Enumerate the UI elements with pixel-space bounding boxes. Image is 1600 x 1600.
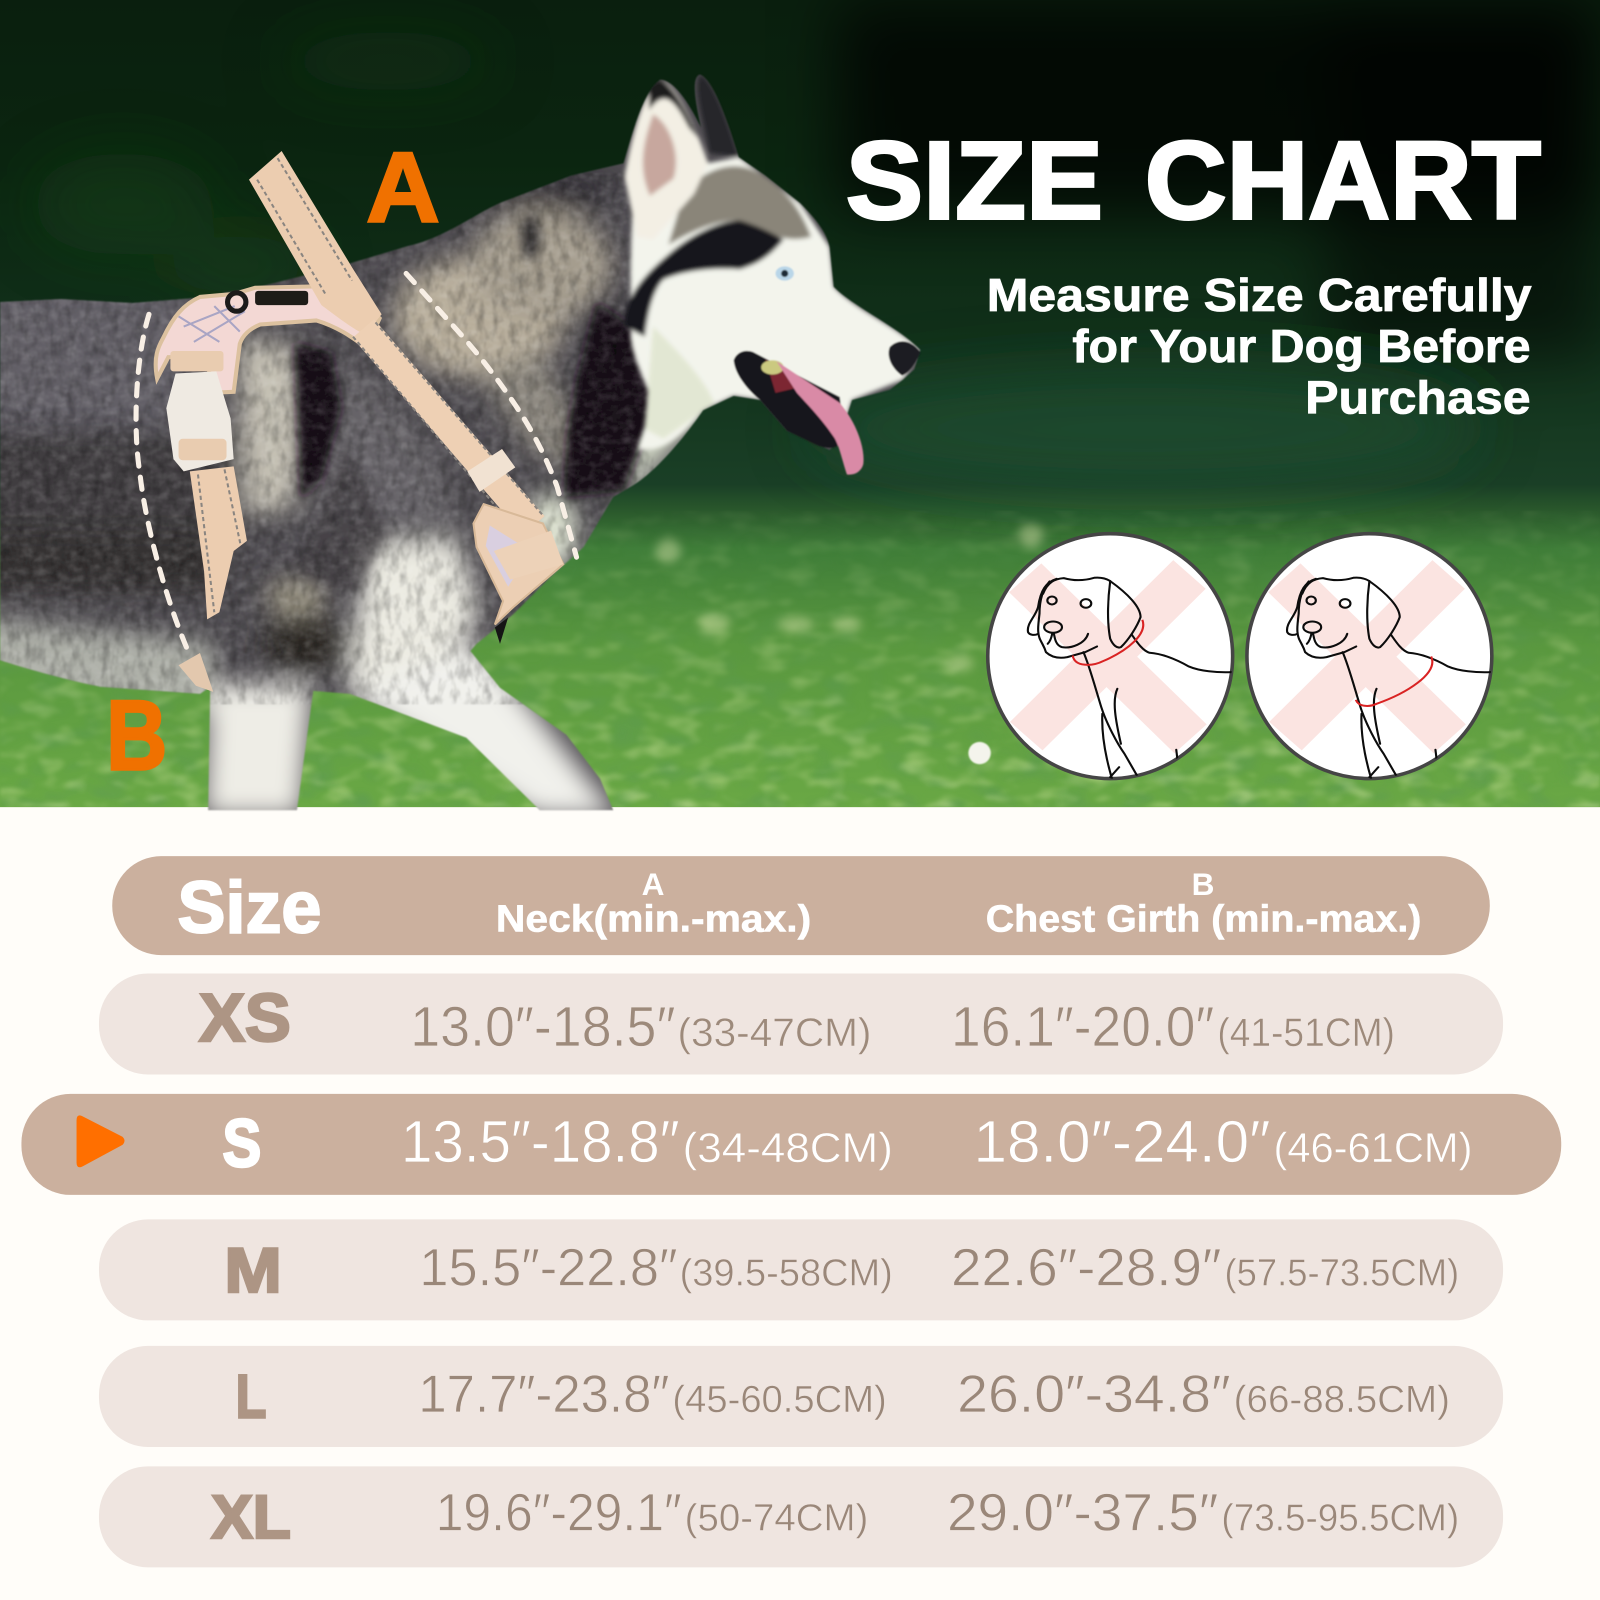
table header row: Chest Girth (min.-max.) bbox=[986, 898, 1421, 940]
row L bbox=[99, 1346, 1503, 1447]
row XS bbox=[99, 973, 1503, 1074]
chest strap bbox=[363, 329, 534, 526]
table header row: Size bbox=[178, 866, 321, 949]
icon: neck measurement circle bbox=[988, 534, 1233, 779]
row XL bbox=[99, 1466, 1503, 1567]
row L: 17.7″-23.8″ bbox=[418, 1365, 669, 1424]
hero photo: dog in a park bbox=[0, 0, 1600, 816]
left strap bbox=[190, 466, 247, 619]
grass with texture bbox=[0, 510, 1600, 807]
table header row: Neck(min.-max.) bbox=[496, 898, 811, 940]
title: SIZE bbox=[846, 119, 1103, 242]
husky dog bbox=[0, 74, 921, 812]
label B: B bbox=[106, 679, 167, 790]
row L: (66-88.5CM) bbox=[1234, 1378, 1450, 1420]
table header row: B bbox=[1192, 866, 1214, 902]
label A: A bbox=[366, 131, 440, 242]
dark fur patches bbox=[294, 214, 655, 592]
subtitle: Measure Size Carefully bbox=[987, 269, 1532, 321]
mouth, tongue, eye and nose bbox=[734, 266, 920, 475]
dashed measure line A bbox=[406, 273, 577, 557]
table header row bbox=[112, 856, 1490, 955]
row S highlighted: 13.5″-18.8″ bbox=[401, 1108, 680, 1175]
blurred foliage background bbox=[31, 0, 1600, 490]
row M: (57.5-73.5CM) bbox=[1224, 1252, 1459, 1294]
row M: 15.5″-22.8″ bbox=[419, 1239, 678, 1298]
row L: L bbox=[236, 1362, 266, 1430]
row S highlighted: S bbox=[222, 1106, 261, 1181]
row XS: (33-47CM) bbox=[678, 1011, 871, 1055]
row M: M bbox=[224, 1236, 282, 1306]
handle bbox=[249, 151, 382, 335]
row XL: (73.5-95.5CM) bbox=[1221, 1497, 1459, 1539]
row M: 22.6″-28.9″ bbox=[951, 1239, 1221, 1298]
row XS: 13.0″-18.5″ bbox=[410, 995, 676, 1058]
head bbox=[624, 74, 920, 450]
title bbox=[846, 119, 1541, 242]
row M bbox=[99, 1219, 1503, 1320]
row S highlighted: 18.0″-24.0″ bbox=[973, 1108, 1270, 1175]
back pad bbox=[156, 286, 380, 393]
row L: 26.0″-34.8″ bbox=[957, 1365, 1231, 1424]
row S highlighted bbox=[21, 1094, 1561, 1195]
white clover bbox=[968, 742, 991, 764]
row XL: (50-74CM) bbox=[685, 1497, 868, 1539]
subtitle: Purchase bbox=[1305, 371, 1531, 423]
chest pad bbox=[473, 504, 563, 624]
arrow marker bbox=[77, 1115, 124, 1167]
harness: peach straps, pad and buckle bbox=[156, 151, 563, 692]
lower tab bbox=[179, 653, 213, 692]
row XS: XS bbox=[199, 981, 291, 1056]
row XL: 19.6″-29.1″ bbox=[436, 1484, 682, 1543]
icon: chest measurement circle bbox=[1247, 534, 1492, 779]
row M: (39.5-58CM) bbox=[680, 1252, 893, 1294]
row S highlighted: (46-61CM) bbox=[1273, 1124, 1472, 1171]
row L: (45-60.5CM) bbox=[672, 1378, 887, 1420]
row S highlighted: (34-48CM) bbox=[683, 1124, 893, 1171]
subtitle bbox=[987, 269, 1532, 423]
table header row: A bbox=[642, 866, 664, 902]
title: CHART bbox=[1145, 119, 1541, 242]
subtitle: for Your Dog Before bbox=[1072, 320, 1531, 372]
row XS: 16.1″-20.0″ bbox=[951, 995, 1214, 1058]
dashed measure line B bbox=[136, 314, 187, 648]
row XL: 29.0″-37.5″ bbox=[947, 1484, 1218, 1543]
translucent buckle bbox=[166, 371, 234, 471]
row XL: XL bbox=[211, 1483, 291, 1551]
row XS: (41-51CM) bbox=[1217, 1011, 1395, 1055]
